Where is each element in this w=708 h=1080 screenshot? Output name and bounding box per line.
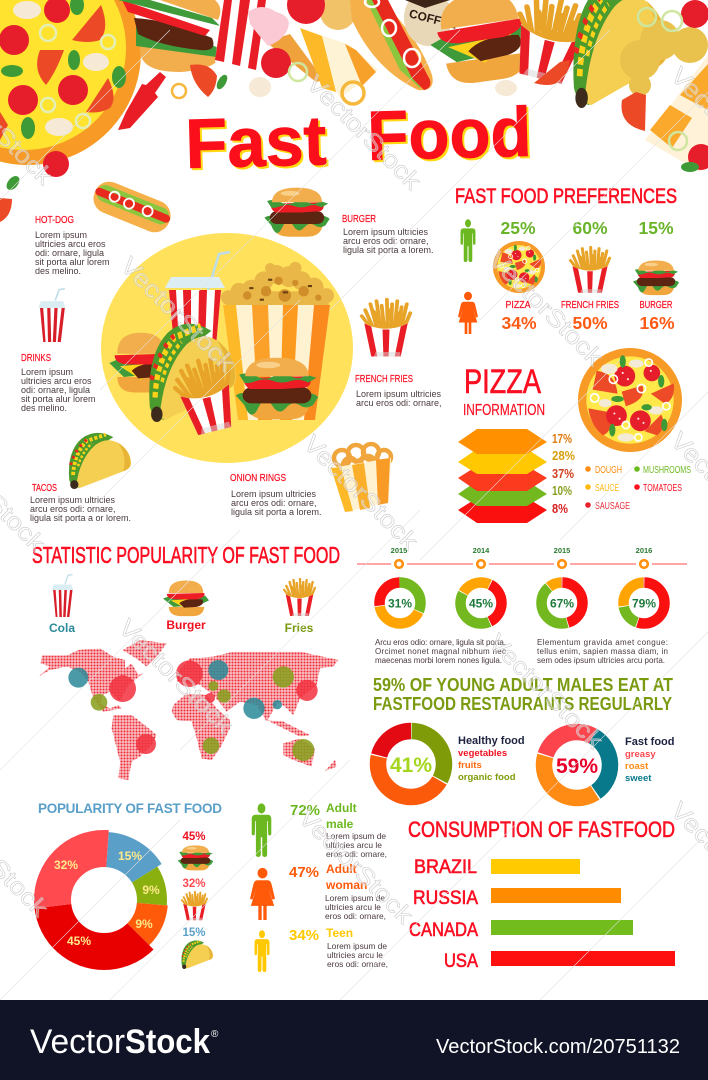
icon: taco in circle [149, 324, 236, 422]
chart percentages: 10% [552, 483, 572, 498]
legend: healthy food: fruits [458, 760, 482, 771]
watermarks: VectorStock [115, 252, 241, 378]
teen: Teen [326, 926, 353, 940]
food labels: BURGER [640, 300, 672, 311]
text block: left [375, 638, 506, 665]
text block: arcu eros odi: ornare, [356, 398, 442, 408]
country labels: CANADA [409, 919, 478, 941]
icon: ketchup bottle [118, 72, 166, 130]
text block: Lorem ipsum ultricies [343, 227, 429, 237]
chart percentages: 37% [552, 466, 574, 481]
heading: FRENCH FRIES [355, 373, 413, 385]
country labels: RUSSIA [413, 887, 478, 909]
heading: HOT-DOG [35, 214, 74, 226]
heading: ONION RINGS [230, 472, 286, 484]
icon: burger top left [118, 0, 224, 72]
callout: tacos [30, 433, 131, 523]
adult male: ultricies arcu le [326, 840, 382, 850]
text block: ligula sit porta a lorem. [231, 507, 322, 517]
text block: Lorem ipsum [21, 367, 73, 377]
icon: fries [362, 300, 410, 356]
dotted world map [38, 640, 338, 780]
donut: 79% [624, 582, 664, 624]
icon: burger [264, 188, 330, 237]
female percentages: 34% [501, 313, 537, 333]
text block: sit porta alur lorem [21, 394, 96, 404]
donut: 41%: 41% [390, 754, 432, 777]
adult male: male [326, 817, 354, 831]
teen [255, 926, 388, 972]
text block: Lorem ipsum [35, 230, 87, 240]
donut labels [54, 849, 160, 948]
female percentages: 16% [639, 313, 675, 333]
heading: DRINKS [21, 352, 51, 364]
timeline markers [391, 556, 652, 572]
layered hexagon chart [458, 429, 547, 523]
watermarks: VectorStock [293, 804, 419, 930]
icon: burger top centre [424, 0, 539, 88]
text block: odi: ornare, ligula [21, 385, 90, 395]
legend: healthy food [458, 735, 525, 783]
watermarks: VectorStock [483, 629, 609, 755]
icon: soda cup [215, 0, 278, 72]
heading: 59% OF YOUNG ADULT MALES EAT AT [373, 675, 673, 695]
watermarks: VectorStock [298, 430, 424, 556]
bar chart [491, 859, 675, 966]
donut: 59%: 59% [556, 755, 598, 778]
panel: statistic popularity [32, 542, 340, 780]
callout: onion rings [230, 444, 391, 517]
timeline years: 2016 [636, 546, 652, 555]
adult male: 72% [290, 802, 320, 819]
title [184, 93, 534, 185]
panel: young adult males [373, 675, 674, 798]
icon: cup [38, 289, 66, 342]
icon: popcorn bucket [221, 262, 334, 420]
icon: ice cream [248, 7, 324, 82]
heading: POPULARITY OF FAST FOOD [38, 801, 222, 816]
footer logo: ® [211, 1029, 219, 1040]
adult woman: ultricies arcu le [325, 902, 381, 912]
adult male [252, 801, 387, 859]
callout: french fries [355, 300, 442, 408]
text block: right: tellus enim, sapien massa diam, in [537, 647, 668, 656]
chart percentages: 17% [552, 431, 572, 446]
adult woman: eros odi: ornare, [325, 911, 386, 921]
legend: burger: 45% [182, 831, 206, 843]
heading: BURGER [342, 213, 376, 225]
adult male: Lorem ipsum de [326, 831, 386, 841]
donut: 67%: 67% [550, 596, 574, 610]
text block: right: sem odes ipsum ultricies arcu porta. [537, 656, 665, 665]
chart legend: TOMATOES [643, 483, 682, 494]
country labels [409, 856, 478, 972]
food labels: Burger [166, 618, 206, 632]
donut labels: 9% [135, 917, 153, 931]
adult male: Adult [326, 801, 357, 815]
yellow circle [101, 233, 353, 463]
text block: left: Arcu eros odio: ornare, ligula sit porta. [375, 638, 506, 647]
footer logo: Stock [125, 1023, 210, 1061]
legend: fast food: sweet [625, 773, 652, 784]
adult male: eros odi: ornare, [326, 849, 387, 859]
text block: Lorem ipsum ultricies [356, 389, 442, 399]
legend: fast food: Fast food [625, 736, 674, 748]
teen: ultricies arcu le [327, 950, 383, 960]
footer reference: VectorStock.com/20751132 [436, 1035, 680, 1058]
food labels: Cola [49, 621, 75, 635]
icon: woman [458, 292, 478, 334]
donut: 79%: 79% [632, 596, 656, 610]
female percentages [501, 313, 675, 333]
legend: healthy food: Healthy food [458, 735, 525, 747]
chart legend: DOUGH [595, 465, 622, 476]
title: Fast [186, 103, 329, 185]
icon: fries [570, 247, 610, 293]
panel: fast food types [101, 233, 353, 463]
panel: pizza information [458, 348, 691, 523]
chart legend [585, 465, 691, 512]
icon: striped bucket [300, 0, 378, 98]
donut labels: 15% [118, 849, 142, 863]
legend: fries [182, 878, 207, 920]
title: Food [366, 93, 532, 175]
text block: ligula sit porta a or lorem. [30, 513, 131, 523]
icon: pizza [493, 241, 545, 293]
teen: eros odi: ornare, [327, 959, 388, 969]
timeline years: 2015 [391, 546, 407, 555]
donut labels: 45% [67, 934, 91, 948]
panel: consumption of fastfood [408, 817, 675, 972]
food labels: PIZZA [506, 300, 531, 311]
donut labels: 9% [142, 883, 160, 897]
text block: right: Elementum gravida amet congue: [537, 638, 668, 647]
text block: ultricies arcu eros [35, 239, 106, 249]
callout: burger [264, 188, 434, 255]
male percentages: 60% [572, 218, 608, 238]
country labels: BRAZIL [414, 856, 477, 878]
text block: arcu eros odi: ornare, [343, 236, 429, 246]
male percentages: 15% [638, 218, 674, 238]
food labels [49, 618, 314, 635]
icon: coffee cup [404, 0, 458, 46]
icon: popcorn top right [620, 20, 708, 96]
callout: hot-dog [35, 177, 175, 276]
donut: 59% [544, 732, 610, 798]
donut: 45% [460, 582, 502, 624]
legend: burger [178, 831, 213, 870]
donut labels: 32% [54, 858, 78, 872]
text block: left: maecenas morbi lorem nones ligula. [375, 656, 502, 665]
exploded donut chart [52, 848, 156, 952]
food banner [0, 0, 708, 222]
text block: ultricies arcu eros [21, 376, 92, 386]
panel: fast food preferences [455, 185, 679, 334]
legend: fries: 32% [182, 878, 206, 890]
icon: large pizza [0, 0, 186, 177]
icon: left burger in circle [109, 333, 173, 392]
icon: cola [52, 575, 73, 617]
adult woman: Adult [326, 862, 357, 876]
map bubbles [68, 660, 318, 761]
text block: sit porta alur lorem [35, 257, 110, 267]
icon: onion rings box [331, 444, 391, 512]
text block: des melino. [21, 403, 67, 413]
icon: cola in circle [165, 252, 230, 346]
chart percentages [552, 431, 575, 516]
legend: fast food: greasy [625, 749, 656, 760]
text block: Lorem ipsum ultricies [231, 489, 317, 499]
decorative toppings [0, 0, 708, 222]
icon: right burger in circle [236, 358, 318, 419]
timeline years: 2014 [473, 546, 490, 555]
watermarks: VectorStock [113, 614, 239, 740]
adult woman: woman [325, 878, 367, 892]
food labels: Fries [285, 621, 314, 635]
heading: PIZZA [464, 363, 541, 401]
donut: 45%: 45% [469, 596, 493, 610]
country labels: USA [444, 950, 478, 972]
chart percentages: 8% [552, 501, 568, 516]
text block: arcu eros odi: ornare, [30, 504, 116, 514]
icon: fries [284, 579, 315, 616]
icon: taco top [573, 0, 668, 108]
donut: 41% [378, 731, 444, 797]
subheading: INFORMATION [463, 402, 545, 419]
timeline line [357, 563, 687, 565]
icon: coffee cup: COFFEE [408, 6, 458, 32]
teen: Lorem ipsum de [327, 941, 387, 951]
legend: fast food: roast [625, 761, 649, 772]
food labels [506, 300, 672, 311]
icon: fries top [506, 0, 595, 87]
text block: left: Orcimet nonet magnal nibhum nec [375, 647, 506, 656]
text block: Lorem ipsum ultricies [30, 495, 116, 505]
footer logo: Vector [30, 1023, 125, 1061]
text block: odi: ornare, ligula [35, 248, 104, 258]
timeline years [391, 546, 652, 555]
adult woman [250, 862, 386, 921]
legend: healthy food: organic food [458, 772, 516, 783]
legend: taco: 15% [182, 927, 206, 939]
icon: burger [633, 260, 679, 295]
legend: taco [181, 927, 213, 969]
panel: yearly timeline [357, 546, 687, 665]
adult woman: 47% [289, 864, 319, 881]
callout: drinks [21, 289, 96, 413]
donut: 67% [542, 582, 582, 624]
female percentages: 50% [572, 313, 608, 333]
text block: des melino. [35, 266, 81, 276]
heading: STATISTIC POPULARITY OF FAST FOOD [32, 542, 340, 568]
donut: 31% [380, 582, 420, 624]
footer bar [0, 1000, 708, 1080]
text block: arcu eros odi: ornare, [231, 498, 317, 508]
male percentages: 25% [500, 218, 536, 238]
icon: taco [69, 433, 131, 489]
watermarks: VectorStock [301, 70, 427, 196]
chart percentages: 28% [552, 448, 575, 463]
text block: ligula sit porta a lorem. [343, 245, 434, 255]
teen: 34% [289, 927, 319, 944]
timeline years: 2015 [554, 546, 570, 555]
heading: TACOS [32, 482, 57, 494]
panel: audience groups [250, 801, 388, 972]
icon: burger [163, 580, 209, 616]
chart legend: SAUSAGE [595, 501, 630, 512]
icon: hot dog [89, 177, 175, 237]
icon: hot dog [350, 0, 433, 90]
panel: popularity of fast food [38, 801, 222, 969]
text block: right [537, 638, 668, 665]
icon: striped box right [645, 55, 708, 172]
legend: fast food [625, 736, 674, 784]
title: Fast [184, 101, 327, 183]
icon: pizza [578, 348, 682, 452]
male percentages [500, 218, 674, 238]
footer logo [30, 1023, 219, 1061]
title: Food [368, 95, 534, 177]
adult woman: Lorem ipsum de [325, 893, 385, 903]
icon: man [461, 219, 475, 262]
food labels: FRENCH FRIES [561, 300, 619, 311]
icon: fries in circle [170, 354, 242, 438]
watermarks: VectorStock [483, 246, 609, 372]
chart legend: SAUCE [595, 483, 619, 494]
legend: healthy food: vegetables [458, 748, 507, 759]
heading [373, 675, 673, 714]
donut: 31%: 31% [388, 596, 412, 610]
